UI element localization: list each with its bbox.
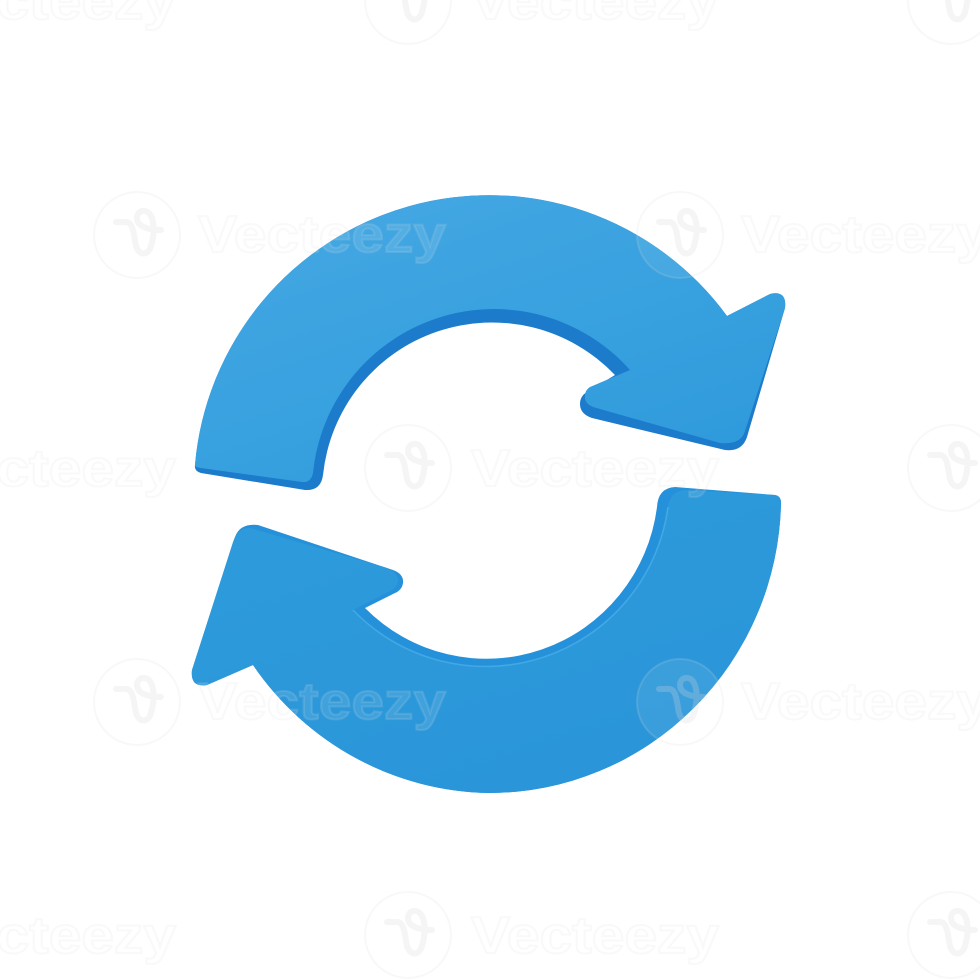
watermark: row 1 — [94, 192, 980, 278]
watermark: row 1: Vecteezy — [198, 206, 446, 264]
icon: top arrow — [195, 195, 785, 490]
watermark: row 0 — [0, 0, 980, 44]
watermark: row 4 — [0, 892, 980, 978]
watermark: row 4: Vecteezy — [471, 907, 719, 965]
rim highlight on inner curve — [353, 507, 668, 666]
watermark: row 3 — [94, 659, 980, 745]
watermark: row 2 — [0, 425, 980, 511]
watermark: row 3: Vecteezy — [198, 673, 446, 731]
watermark: row 2: Vecteezy — [471, 440, 719, 498]
watermark: row 1: Vecteezy — [741, 206, 980, 264]
watermark: row 3: Vecteezy — [741, 673, 980, 731]
icon: bottom arrow — [192, 487, 781, 793]
